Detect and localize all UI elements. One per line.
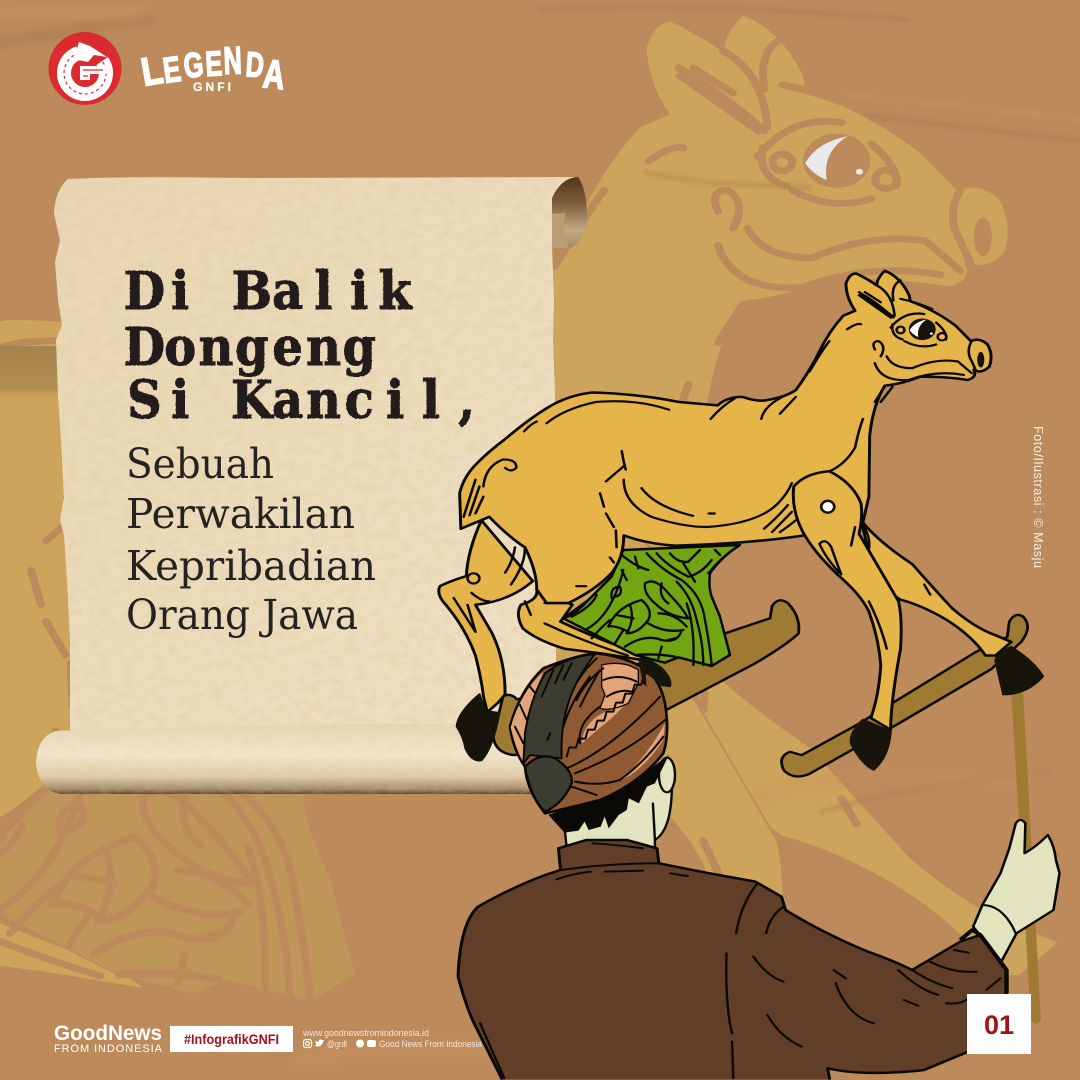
scroll curl — [550, 177, 587, 248]
hoof on turban — [638, 658, 671, 687]
turban — [510, 653, 671, 813]
glove cuff — [982, 905, 1016, 933]
scroll sheet — [54, 177, 575, 740]
turban bun — [525, 756, 572, 812]
legenda wordmark: G — [182, 45, 205, 86]
parchment scroll — [36, 177, 587, 794]
goodnews logo: FROM INDONESIA — [54, 1043, 163, 1055]
icon: instagram — [304, 1040, 312, 1048]
kancil rear and far legs — [518, 520, 1011, 661]
logo badge — [48, 32, 122, 105]
icon: twitter — [315, 1039, 324, 1046]
kancil torso, head and skirt — [454, 271, 1011, 666]
foreleg details — [819, 525, 930, 649]
social links: @gnfi — [327, 1039, 347, 1050]
front crossbar — [782, 615, 1028, 776]
goodnews logo — [54, 1022, 163, 1055]
title: Dongeng — [124, 316, 376, 377]
jacket — [458, 840, 1006, 1080]
legenda wordmark: E — [204, 44, 223, 84]
ear — [659, 758, 675, 792]
goodnews logo: GoodNews — [54, 1022, 162, 1045]
puppeteer — [458, 653, 1060, 1080]
title: Si Kancil, — [127, 369, 475, 430]
kancil puppet — [439, 271, 1043, 770]
legenda wordmark: GNFI — [193, 80, 237, 94]
gloved hand — [973, 820, 1060, 962]
kancil near foreleg — [793, 471, 901, 730]
kancil main body and head — [454, 271, 991, 655]
kancil hooves — [457, 647, 1043, 770]
social links: www.goodnewsfromindonesia.id — [302, 1028, 429, 1039]
icon: facebook — [356, 1040, 364, 1048]
subtitle — [126, 440, 376, 639]
subtitle: Kepribadian — [126, 542, 376, 590]
title: Di Balik — [124, 260, 413, 321]
shoulder joint — [820, 500, 836, 514]
legenda wordmark: D — [244, 45, 265, 85]
jacket folds — [480, 843, 1000, 1078]
leaf skirt — [563, 545, 740, 666]
legenda wordmark: E — [161, 49, 183, 91]
subtitle: Orang Jawa — [126, 591, 358, 639]
hashtag box — [170, 1026, 293, 1052]
far rear leg — [439, 520, 533, 712]
icon: youtube — [367, 1040, 376, 1047]
subtitle: Perwakilan — [126, 490, 355, 538]
social links: Good News From Indonesia — [379, 1039, 483, 1050]
page number — [967, 994, 1031, 1054]
puppet sticks — [493, 600, 1041, 1024]
page number: 01 — [984, 1010, 1014, 1040]
rear crossbar — [493, 600, 799, 755]
photo credit: Foto/Ilustrasi : © Masju — [1031, 426, 1045, 568]
legenda wordmark: A — [261, 52, 287, 98]
social links — [302, 1028, 483, 1050]
hair — [548, 755, 669, 833]
turban dark band — [523, 654, 595, 763]
turban zigzag — [567, 676, 644, 757]
subtitle: Sebuah — [126, 440, 274, 488]
hashtag box: #InfografikGNFI — [184, 1031, 279, 1047]
title — [124, 260, 475, 430]
rod — [1011, 693, 1041, 1024]
neck — [565, 767, 672, 848]
legenda wordmark: N — [223, 39, 242, 82]
scroll bottom roll — [36, 724, 540, 794]
legenda wordmark — [138, 39, 287, 98]
legenda wordmark: L — [138, 48, 166, 94]
